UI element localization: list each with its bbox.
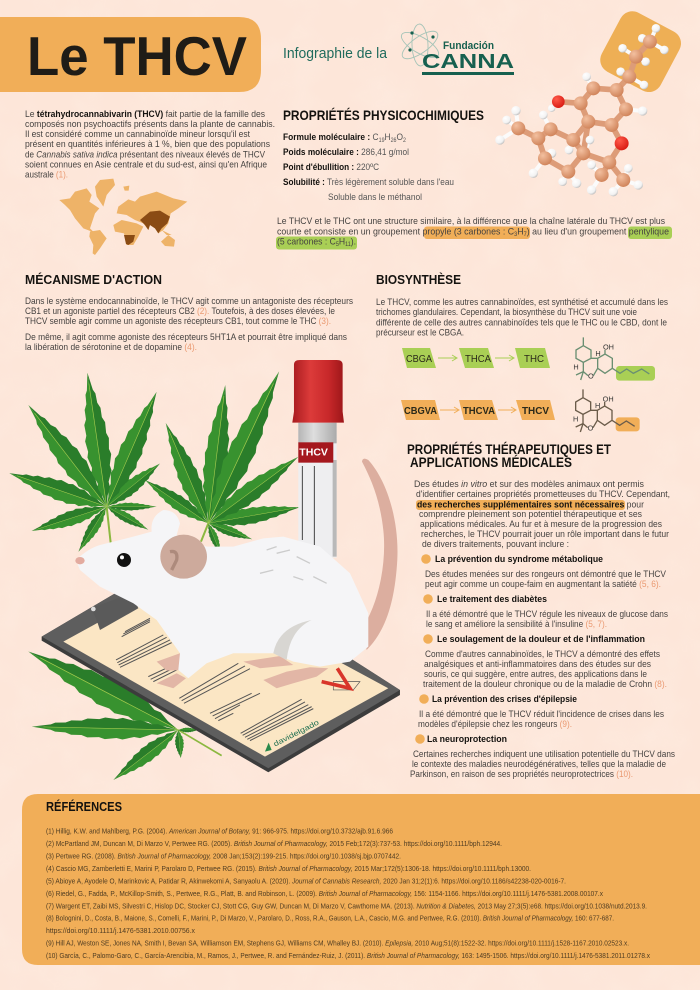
icon: world map [59, 179, 187, 255]
item: douleur et inflammation: analgésiques et anti-inflammatoires dans des études sur des [424, 659, 651, 670]
reference list: https://doi.org/10.1111/j.1476-5381.2010.00756.x [46, 927, 195, 935]
item: neuroprotection: le contexte des maladies neurodégénératives, telles que la maladie de [412, 759, 666, 770]
physicochemical properties list: Soluble dans le méthanol [328, 192, 422, 203]
intro paragraph: de Cannabis sativa indica présentant des niveaux élevés de THCV [25, 150, 266, 160]
item: diabètes: le sang et améliore la sensibilité à l'insuline (5, 7). [426, 619, 607, 630]
structure comparison paragraph: (5 carbones : C [277, 236, 342, 248]
clipboard [42, 552, 400, 772]
subtitle: Infographie de la [283, 45, 388, 62]
item: syndrome métabolique [421, 554, 667, 590]
therapeutic intro text: recherches, le THCV pourrait jouer un rôle important dans le futur [421, 529, 669, 540]
structure comparison paragraph [276, 216, 672, 250]
pathway: THCV: CBGVA [404, 405, 437, 417]
heading: propriétés thérapeutiques [407, 442, 612, 470]
item: douleur et inflammation [423, 634, 667, 690]
cannabis leaf left [6, 371, 167, 555]
reference list [46, 828, 650, 960]
intro paragraph: australe (1). [25, 170, 68, 180]
item: diabètes: Il a été démontré que le THCV régule les niveaux de glucose dans [426, 609, 668, 620]
structure comparison paragraph: ). [351, 236, 356, 248]
logo: Fundación CANNA: Fundación [443, 40, 494, 52]
structure: THCV: OH [603, 394, 614, 403]
structure comparison paragraph: 5 [336, 242, 339, 248]
biosynthesis text: précurseur est le CBGA. [376, 328, 464, 338]
structure comparison paragraph: Le THCV et le THC ont une structure similaire, à la différence que la chaîne latérale du THCV est plus [277, 216, 665, 227]
item: diabètes [423, 594, 668, 630]
therapeutic intro text: des recherches supplémentaires sont nécessaires pour [417, 500, 644, 510]
structure comparison paragraph: H [517, 226, 524, 238]
structure comparison paragraph: au lieu d'un groupement pentylique [532, 226, 680, 238]
mechanism text: Dans le système endocannabinoïde, le THCV agit comme un antagoniste des récepteurs [25, 296, 353, 307]
item: syndrome métabolique: La prévention du syndrome métabolique [435, 554, 603, 565]
item: épilepsie [418, 694, 664, 730]
intro paragraph: Il est considéré comme un cannabinoïde mineur lorsqu'il est [25, 129, 250, 140]
highlight: recherches [416, 500, 625, 510]
reference list: (7) Wargent ET, Zaibi MS, Silvestri C, Hislop DC, Stocker CJ, Stott CG, Guy GW, Duncan M, Di Marzo V, Cawthorne MA. (2013). Nutrition & Diabetes, 2013 May 27;3(5):e68. https://doi.org/10.1038/nutd.2013.9. [46, 902, 647, 910]
physicochemical properties list: 19 [379, 138, 385, 144]
title banner: Le THCV [27, 25, 247, 87]
physicochemical properties list: Solubilité : Très légèrement soluble dans l'eau [283, 177, 454, 188]
structure: THCV [573, 389, 640, 432]
item: diabètes: Le traitement des diabètes [437, 594, 547, 605]
therapeutic intro text: Des études in vitro et sur des modèles animaux ont permis [414, 479, 644, 490]
reference list: (2) McPartland JM, Duncan M, Di Marzo V, Pertwee RG. (2005). British Journal of Pharmacology, 2015 Feb;172(3):737-53. https://doi.org/10.1111/bph.12944. [46, 840, 502, 848]
illustration: mouse, leaves, tube and clipboard [6, 360, 400, 786]
reference list: (6) Riedel, G., Fadda, P., McKillop-Smith, S., Pertwee, R.G., Platt, B. and Robinson, L. (2009). British Journal of Pharmacology, 156: 1154-1166. https://doi.org/10.1111/j.1476-5381.2008.00107.x [46, 890, 603, 898]
intro paragraph: soient connues en Asie centrale et du sud-est, ainsi qu'en Afrique [25, 160, 267, 170]
intro paragraph: présent en quantités inférieures à 1 %, bien que des populations [25, 139, 270, 150]
highlight: propyle [424, 226, 530, 239]
heading: propriétés thérapeutiques: APPLICATIONS MÉDICALES [410, 455, 572, 470]
physicochemical properties list: O [397, 132, 403, 143]
item: syndrome métabolique: Des études menées sur des rongeurs ont démontré que le THCV [425, 569, 667, 580]
test tube THCV [292, 360, 344, 558]
therapeutic intro text [414, 479, 670, 550]
reference list: (1) Hillig, K.W. and Mahlberg, P.G. (2004). American Journal of Botany, 91: 966-975. https://doi.org/10.3732/ajb.91.6.966 [46, 828, 393, 836]
highlighted propyl chain [596, 7, 686, 97]
item: neuroprotection [410, 734, 675, 780]
structure comparison paragraph: ) [527, 226, 530, 238]
pathway: THC: THCA [465, 353, 491, 365]
therapeutic intro text: applications médicales. Au fur et à mesure de la progression des [420, 519, 662, 530]
molecule 3D model [495, 7, 686, 196]
mechanism text: la libération de sérotonine et de dopamine (4). [25, 342, 197, 353]
item: épilepsie: Il a été démontré que le THCV réduit l'incidence de crises dans les [419, 709, 664, 720]
physicochemical properties list: Point d'ébullition : 220ºC [283, 162, 379, 173]
panel: references [22, 794, 700, 965]
test tube THCV: THCV [299, 448, 328, 459]
structure comparison paragraph: courte et consiste en un groupement propyle (3 carbones : C [277, 226, 533, 238]
mechanism text [25, 296, 353, 353]
item: douleur et inflammation: souris, ce qui suggère, entre autres, des applications dans le [424, 669, 647, 680]
item: épilepsie: modèles d'épilepsie chez les rongeurs (9). [418, 719, 572, 730]
mouse tail [362, 459, 398, 650]
physicochemical properties list: Formule moléculaire : C [283, 132, 382, 143]
reference list: (4) Cascio MG, Zamberletti E, Marini P, Parolaro D, Pertwee RG. (2015). British Journal of Pharmacology, 2015 Mar;172(5):1306-18. https://doi.org/10.1111/bph.13000. [46, 865, 531, 873]
structure: THCV: H [595, 401, 600, 410]
reference list: (8) Bolognini, D., Costa, B., Maione, S., Comelli, F., Marini, P., Di Marzo, V., Parolaro, D., Ross, R.A., Gauson, L.A., Cascio, M.G. and Pertwee, R.G. (2010). British Journal of Pharmacology, 160: 677-687. [46, 914, 614, 922]
reference list: (10) García, C., Palomo-Garo, C., García-Arencibia, M., Ramos, J., Pertwee, R. and Fernández-Ruiz, J. (2011). British Journal of Pharmacology, 163: 1495-1506. https://doi.org/10.1111/j.1476-5381.2011.01278.x [46, 952, 650, 960]
therapeutic intro text: comprendre pleinement son potentiel thérapeutique et ses [419, 509, 642, 520]
physicochemical properties list: H [385, 132, 391, 143]
physicochemical properties list: 2 [403, 138, 407, 144]
physicochemical properties list: Poids moléculaire : 286,41 g/mol [283, 147, 409, 158]
item: douleur et inflammation: Comme d'autres cannabinoïdes, le THCV a démontré des effets [425, 649, 660, 660]
structure comparison paragraph: 7 [524, 232, 527, 238]
structure: THC: OH [603, 342, 614, 351]
highlight: pentylique [276, 226, 672, 250]
pathway: THCV: THCVA [463, 405, 495, 417]
biosynthesis text: différente de celle des autres cannabinoïdes tels que le THC ou le CBD, dont le [376, 318, 667, 328]
structure: THC: O [588, 371, 594, 380]
heading: mécanisme d'action: MÉCANISME D'ACTION [25, 272, 162, 287]
heading: propriétés physicochimiques: PROPRIÉTÉS PHYSICOCHIMIQUES [283, 107, 484, 123]
structure: THCV: H [573, 414, 578, 423]
reference list: (5) Abioye A, Ayodele O, Marinkovic A, Patidar R, Akinwekomi A, Sanyaolu A. (2020). Journal of Cannabis Research, 2020 Jan 31;2(1):6. https://doi.org/10.1186/s42238-020-0016-7. [46, 878, 566, 886]
structure: THC: H [573, 362, 579, 371]
reference list: (9) Hill AJ, Weston SE, Jones NA, Smith I, Bevan SA, Williamson EM, Stephens GJ, Williams CM, Whalley BJ. (2010). Epilepsia, 2010 Aug;51(8):1522-32. https://doi.org/10.1111/j.1528-1167.2010.02523.x. [46, 940, 629, 948]
mechanism text: De même, il agit comme agoniste des récepteurs 5HT1A et pourrait être impliqué dans [25, 332, 347, 343]
pathway: THC: CBGA [406, 353, 432, 365]
cannabis leaf lower [21, 638, 222, 786]
pathway: THC [402, 348, 550, 368]
biosynthesis text [376, 297, 668, 338]
logo: Fundación CANNA [398, 24, 514, 75]
pathway: THCV [401, 400, 555, 420]
heading: références: RÉFÉRENCES [46, 799, 122, 814]
physicochemical properties list [283, 132, 454, 203]
structure: THC [573, 337, 655, 381]
cannabis leaf right [141, 366, 304, 556]
item: syndrome métabolique: peut agir comme un coupe-faim en augmentant la satiété (5, 6). [425, 579, 661, 590]
item: neuroprotection: La neuroprotection [427, 734, 507, 745]
structure: THCV: O [588, 423, 594, 432]
structure comparison paragraph: 3 [514, 232, 518, 238]
clipboard: davidelgado [272, 718, 320, 748]
logo: Fundación CANNA: CANNA [422, 51, 514, 73]
pathway: THC: THC [524, 353, 544, 365]
physicochemical properties list: 26 [391, 138, 397, 144]
intro paragraph: composés non psychoactifs présents dans la plante de cannabis. [25, 119, 275, 130]
therapeutic intro text: d'identifier certaines propriétés prometteuses du THCV. Cependant, [416, 489, 670, 500]
structure comparison paragraph: 11 [345, 242, 351, 248]
mechanism text: CB1 et un agoniste partiel des récepteurs CB2 (2). Toutefois, à des doses élevées, le [25, 306, 335, 317]
heading: biosynthèse: BIOSYNTHÈSE [376, 272, 461, 287]
heading: propriétés thérapeutiques: PROPRIÉTÉS THÉRAPEUTIQUES ET [407, 442, 612, 457]
structure comparison paragraph: H [339, 236, 345, 248]
biosynthesis text: trichomes glandulaires. Cependant, la biosynthèse du THCV suit une voie [376, 307, 637, 318]
mouse [75, 510, 368, 688]
pathway: THCV: THCV [522, 405, 549, 417]
item: épilepsie: La prévention des crises d'épilepsie [432, 694, 577, 705]
item: douleur et inflammation: Le soulagement de la douleur et de l'inflammation [437, 634, 645, 645]
intro paragraph [25, 109, 275, 180]
structure: THC: H [595, 349, 601, 358]
therapeutic intro text: de divers traitements, pouvant inclure : [422, 539, 569, 550]
reference list: (3) Pertwee RG. (2008). British Journal of Pharmacology, 2008 Jan;153(2):199-215. https://doi.org/10.1038/sj.bjp.0707442. [46, 852, 401, 860]
intro paragraph: Le tétrahydrocannabivarin (THCV) fait partie de la famille des [25, 109, 265, 120]
mechanism text: THCV semble agir comme un agoniste des récepteurs CB1, tout comme le THC (3). [25, 316, 331, 327]
item: neuroprotection: Parkinson, en raison de ses propriétés neuroprotectrices (10). [410, 769, 633, 780]
item: douleur et inflammation: traitement de la douleur chronique ou de la maladie de Crohn (8). [423, 679, 667, 690]
